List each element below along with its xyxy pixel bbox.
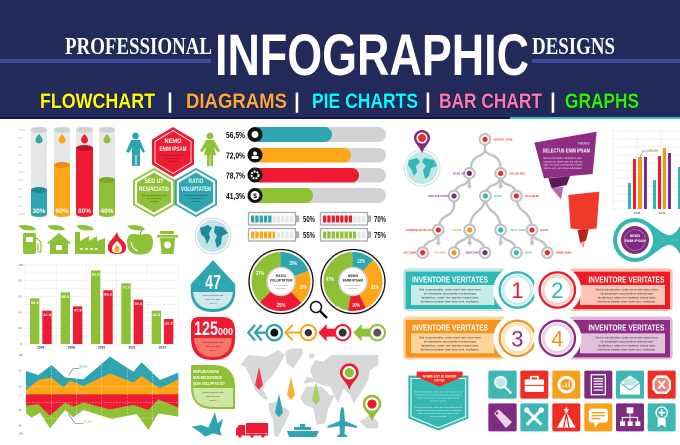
category strip: | <box>550 90 556 113</box>
shield callout: NOBIS EST ELIGENDI <box>423 374 456 378</box>
flowchart tree: EOS VOLUPTAS <box>428 194 449 198</box>
globe with pin <box>404 130 440 186</box>
bar chart: left: 2010 <box>98 346 106 350</box>
bar chart: left: 58.8 <box>31 300 39 305</box>
bar chart: left: 47.8 <box>74 308 82 313</box>
donut chart: nemo enim ipsam: 12% <box>357 259 365 265</box>
donut chart: ratio voluptatem: Sed ut perspiciatis <box>274 284 288 287</box>
icon: recycling bin <box>157 231 178 254</box>
hexagon: nemo enim ipsam: voluptatem <box>169 160 178 163</box>
numbered panels <box>403 266 673 362</box>
bar chart: left: 20 <box>19 326 22 330</box>
icon: bird <box>192 412 223 437</box>
tile: speech bubble <box>584 403 612 431</box>
category strip: GRAPHS <box>565 90 639 113</box>
bar chart: left: 2011 <box>128 346 136 350</box>
battery: 70%: 70% <box>374 215 386 224</box>
donut chart: ratio voluptatem: RATIO <box>276 274 287 278</box>
shield callout: Sed ut perspiciatis, unde omnis iste natus error sit <box>414 406 463 409</box>
bar chart: left: 42.8 <box>43 312 52 317</box>
flowchart tree: VITAE SIT <box>453 171 466 175</box>
bar: 41,3% <box>226 188 313 203</box>
pin: star <box>414 130 430 153</box>
icon: magnifier <box>310 302 327 318</box>
flowchart tree: IN ALIQUID <box>525 194 539 198</box>
icon: apple <box>127 225 153 255</box>
marker: green spike <box>312 382 320 405</box>
icon tiles <box>488 371 676 431</box>
hexagon: ratio voluptatem: RATIO <box>188 178 204 185</box>
infinity loop badge: ENIM IPSAM <box>625 239 645 243</box>
heading: designs: DESIGNS <box>532 34 615 60</box>
panel 1: sit voluptatem accusantium doloremque <box>424 291 477 295</box>
marker: red spike <box>255 367 263 390</box>
bar: 41,3%: 41,3% <box>226 192 245 201</box>
flowchart tree: DOLOR SED <box>509 171 525 175</box>
hexagon: nemo enim ipsam: iste natus error sit <box>166 157 181 160</box>
arrow: green <box>353 324 385 341</box>
bar chart: right: 2008 <box>634 211 641 215</box>
hexagon: ratio voluptatem: voluptatem <box>192 200 201 203</box>
panel 1 <box>403 266 541 314</box>
category strip: | <box>167 90 173 113</box>
marker: orange spike <box>287 377 295 400</box>
icon: truck <box>236 423 268 438</box>
hexagon: nemo enim ipsam: Sed ut perspiciatis unde omnis <box>161 154 185 157</box>
hexagon: ratio voluptatem: Sed ut perspiciatis unde omnis <box>184 194 208 197</box>
shield callout: totam rem aperiam eaque ipsa, quae ab illo <box>418 412 460 415</box>
shield callout: voluptatem accusantium doloremque laudantium <box>415 409 462 412</box>
badge: 47: Sed ut perspiciatis unde <box>202 294 225 297</box>
tile: org chart <box>616 403 644 431</box>
badge: 125000: 125 <box>194 319 218 340</box>
flowchart tree: MAGNI <box>453 228 462 232</box>
bar chart: left <box>19 263 178 350</box>
area chart: 100 <box>19 432 23 435</box>
ribbon: purple: dolores eos, qui ratione voluptatem <box>543 167 582 170</box>
bar chart: left: 100 <box>19 263 24 267</box>
arrow: orange <box>285 325 316 340</box>
flowchart tree: NEC QUIA <box>403 251 416 255</box>
panel 1: 1 <box>511 278 523 303</box>
flowchart tree <box>403 134 572 258</box>
callout: green quote: NON RECUSANDAE <box>193 375 223 381</box>
infinity loop badge: NEMO <box>630 234 641 238</box>
area chart: 100 <box>19 354 23 357</box>
panel 2: architecto beatae vitae dicta sunt, explicabo. <box>597 299 656 303</box>
hexagon: nemo enim ipsam <box>152 127 194 177</box>
bar chart: left: 2009 <box>68 346 75 350</box>
flowchart tree: CONSEQUATUR AUT <box>406 228 433 232</box>
icon: ship <box>287 424 319 437</box>
panel 3 <box>403 314 541 362</box>
hexagon: ratio voluptatem <box>175 168 217 217</box>
tile: shield <box>648 371 676 399</box>
shield callout: inventore veritatis <box>430 400 447 403</box>
shield callout: OPTIO <box>434 378 445 382</box>
bar chart: left: 77.2 <box>122 285 131 290</box>
flowchart tree: NEMO ENIM <box>556 251 572 255</box>
icon: fuel pump <box>18 225 41 254</box>
hexagon: sed ut respiciatis: Sed ut perspiciatis unde omnis <box>142 194 166 197</box>
flowchart tree: BEATAE VITAE <box>494 137 513 141</box>
hexagon: ratio voluptatem: iste natus error sit <box>189 197 204 200</box>
bar chart: left: 32.8 <box>165 320 173 325</box>
bar: 72,0% <box>226 148 351 162</box>
bar chart: right <box>613 131 680 215</box>
bar chart: right: 88,000 <box>649 148 659 152</box>
donut chart: nemo enim ipsam: Sed ut perspiciatis <box>346 284 360 287</box>
hexagon: sed ut respiciatis <box>133 168 175 217</box>
panel 2: laudantium, totam rem aperiam eaque ipsa, <box>598 295 656 299</box>
hexagon: sed ut respiciatis: SED UT <box>144 178 164 185</box>
panel 2: 2 <box>551 278 563 303</box>
area chart: 20 <box>19 385 22 388</box>
infinity loop badge <box>613 218 680 262</box>
bar: 56,5% <box>226 127 332 142</box>
tube: orange 60%: 60% <box>55 208 69 215</box>
flowchart tree: DOLORE <box>434 251 446 255</box>
bar chart: left: 40 <box>19 310 22 314</box>
donut chart: ratio voluptatem: VOLUPTATEM <box>270 278 293 282</box>
panel 1: Sed ut perspiciatis, unde omnis iste natus error <box>419 287 481 291</box>
tube: teal 30%: 30% <box>32 208 46 215</box>
bar chart: left: 65.8 <box>61 294 70 299</box>
ribbon: purple: DELECTUS ENIM IPSAM <box>543 148 590 154</box>
category strip: | <box>294 90 300 113</box>
icon: globe left <box>195 218 231 254</box>
tile: award ribbon <box>648 403 676 431</box>
bar chart: left: 56.8 <box>134 301 143 306</box>
ribbon: purple: Nemo enim ipsam voluptatem quia <box>543 157 582 160</box>
header banner <box>0 0 680 119</box>
panel 1: INVENTORE VERITATES <box>412 274 488 284</box>
badge: 47: omnis iste natus <box>206 298 220 301</box>
ribbon: purple: NEMO <box>578 141 590 146</box>
bar: 41,3%: $ <box>253 193 257 200</box>
bar chart: left: 60 <box>19 294 22 298</box>
tile: envelope <box>616 371 644 399</box>
panel 1: architecto beatae vitae dicta sunt, explicabo. <box>421 299 480 303</box>
bar: 56,5%: 56,5% <box>226 131 245 140</box>
category strip: DIAGRAMS <box>186 90 287 113</box>
donut chart: ratio voluptatem <box>249 250 313 314</box>
callout: green quote: REPUDIANDAE <box>193 369 220 375</box>
badge: 125000: error sit <box>210 349 217 352</box>
bar: 72,0%: 72,0% <box>226 152 245 160</box>
hexagon cluster <box>133 127 217 217</box>
icon: airplane <box>328 407 357 437</box>
area chart: 40 <box>19 409 22 412</box>
callout: green quote: omnis iste natus <box>206 395 220 398</box>
eco icons row <box>18 225 178 255</box>
bar chart: left: 80 <box>19 279 22 283</box>
flowchart tree: NESCIUNT <box>466 251 480 255</box>
panel 3: architecto beatae vitae dicta sunt, explicabo. <box>421 348 480 352</box>
donut chart: ratio voluptatem: unde omnis <box>276 288 286 290</box>
hexagon: sed ut respiciatis: voluptatem <box>150 200 159 203</box>
hexagon: nemo enim ipsam: ENIM IPSAM <box>160 146 186 153</box>
panel 4: 4 <box>551 326 563 351</box>
area chart: 0 <box>20 393 22 396</box>
icon: female figure <box>200 133 220 166</box>
battery indicators <box>248 212 386 241</box>
arrow: teal <box>248 325 282 340</box>
battery: 50%: 50% <box>303 215 315 224</box>
ribbon: purple: fugit, sed quia consequuntur magni <box>543 164 582 167</box>
hexagon: ratio voluptatem: VOLUPTATEM <box>181 186 211 193</box>
panel 3: laudantium, totam rem aperiam eaque ipsa, <box>421 344 479 348</box>
badge: 125000: Sed ut perspiciatis unde <box>202 341 225 344</box>
panel 1: laudantium, totam rem aperiam eaque ipsa, <box>421 295 479 299</box>
shield callout: inventore veritatis <box>430 415 447 418</box>
panel 4: sit voluptatem accusantium doloremque <box>600 340 653 344</box>
ribbon: red <box>568 192 599 248</box>
callout: green quote <box>191 365 235 409</box>
tube: red 80%: 80% <box>78 208 91 215</box>
panel 3: sit voluptatem accusantium doloremque <box>424 340 477 344</box>
donut chart: nemo enim ipsam: 10% <box>352 303 360 309</box>
battery: 75%: 75% <box>374 231 386 240</box>
hexagon: sed ut respiciatis: iste natus error sit <box>147 197 162 200</box>
hexagon: nemo enim ipsam: NEMO <box>164 138 182 145</box>
category strip: PIE CHARTS <box>312 90 418 113</box>
tile: document <box>584 371 612 399</box>
heading: infographic: INFOGRAPHIC <box>215 23 529 88</box>
area chart: 58,000 <box>79 364 88 368</box>
tile: tent <box>552 403 580 431</box>
panel 3: Sed ut perspiciatis, unde omnis iste natus error <box>419 336 481 340</box>
donut chart: nemo enim ipsam: 31% <box>371 285 379 291</box>
tile: search <box>488 371 517 399</box>
badge: 47 <box>191 260 235 312</box>
tile: chart dial <box>552 371 580 399</box>
icon: factory <box>75 225 105 254</box>
callout: green quote: QUIA VOLUPTAS SIT <box>193 381 225 387</box>
donut chart: nemo enim ipsam: ENIM IPSAM <box>343 278 363 282</box>
percentage bars <box>226 127 386 203</box>
panel 4: laudantium, totam rem aperiam eaque ipsa, <box>598 344 656 348</box>
flowchart tree: ID EST <box>540 228 549 232</box>
area chart: 25,000 <box>83 420 92 424</box>
tile: tag <box>488 403 517 431</box>
tube: green 40%: 40% <box>100 208 114 215</box>
flowchart tree: VELIT ESSE <box>510 228 526 232</box>
battery: 55%: 55% <box>303 231 315 240</box>
shield callout: Sed ut perspiciatis, unde omnis iste natus error sit <box>414 391 463 394</box>
badge: 47: error sit <box>210 302 217 305</box>
bar chart: left: 91.8 <box>92 272 100 277</box>
donut chart: nemo enim ipsam: unde omnis <box>348 288 358 290</box>
panel 2: sit voluptatem accusantium doloremque <box>600 291 653 295</box>
world map <box>240 348 381 437</box>
flowchart tree: QUAE <box>494 194 502 198</box>
icon: male figure <box>126 133 145 166</box>
category strip: BAR CHART <box>439 90 542 113</box>
flowchart tree: QUIS <box>525 251 532 255</box>
hexagon: sed ut respiciatis: RESPICIATIS <box>139 186 169 193</box>
icon: flame <box>108 232 126 254</box>
panel 3: INVENTORE VERITATES <box>412 323 488 333</box>
callout: green quote: Sed ut perspiciatis unde <box>202 391 225 394</box>
area chart: 60 <box>19 370 22 373</box>
panel 4: architecto beatae vitae dicta sunt, explicabo. <box>597 348 656 352</box>
shield callout: totam rem aperiam eaque ipsa, quae ab illo <box>418 397 460 400</box>
badge: 47: 47 <box>205 272 221 294</box>
donut chart: ratio voluptatem: 19% <box>299 285 307 291</box>
badge: 125000: 000 <box>218 327 233 338</box>
area chart <box>19 354 178 435</box>
bar chart: left: 2012 <box>159 346 166 350</box>
tile: tools <box>520 403 548 431</box>
tube gauges <box>18 127 115 217</box>
bar: 78,7% <box>226 168 359 182</box>
panel 2: Sed ut perspiciatis, unde omnis iste natus error <box>596 287 658 291</box>
callout: green quote: error sit <box>210 399 217 402</box>
tile: briefcase <box>520 371 548 399</box>
bar chart: left: 0 <box>20 342 22 346</box>
donut chart: ratio voluptatem: 37% <box>256 271 264 277</box>
bar chart: left: 2008 <box>37 346 45 350</box>
donut chart: ratio voluptatem: 25% <box>276 303 286 309</box>
bar chart: right: 2009 <box>659 211 666 215</box>
arrow row <box>248 324 385 341</box>
area chart: 80 <box>19 425 22 428</box>
panel 3: 3 <box>511 326 523 351</box>
bar chart: left: 43.3 <box>152 312 161 317</box>
pin: asia <box>340 363 359 390</box>
ribbon: purple: voluptas sit, aspernatur aut odit aut <box>543 160 582 163</box>
shield callout <box>408 372 468 431</box>
bar chart: left: 68.3 <box>104 292 113 297</box>
category strip: FLOWCHART <box>40 90 155 113</box>
donut chart: nemo enim ipsam: NEMO <box>348 274 358 278</box>
panel 4 <box>533 314 673 362</box>
donut chart: ratio voluptatem: 19% <box>289 261 297 267</box>
arrow: red <box>318 324 350 341</box>
icon: house <box>47 225 71 254</box>
shield callout: voluptatem accusantium doloremque laudantium <box>415 394 462 397</box>
heading: professional: PROFESSIONAL <box>65 34 212 60</box>
donut chart: nemo enim ipsam: 47% <box>326 277 334 283</box>
ribbon: purple <box>534 132 597 199</box>
badge: 125000: omnis iste natus <box>206 345 220 348</box>
category strip <box>40 90 639 113</box>
panel 2 <box>533 266 673 314</box>
panel 4: Sed ut perspiciatis, unde omnis iste natus error <box>596 336 658 340</box>
badge: 125000 <box>191 317 235 360</box>
donut chart: nemo enim ipsam <box>321 250 385 314</box>
marker: teal spike <box>275 394 283 417</box>
category strip: | <box>425 90 431 113</box>
bar: 78,7%: 78,7% <box>226 172 245 180</box>
pin: australia <box>363 395 381 421</box>
